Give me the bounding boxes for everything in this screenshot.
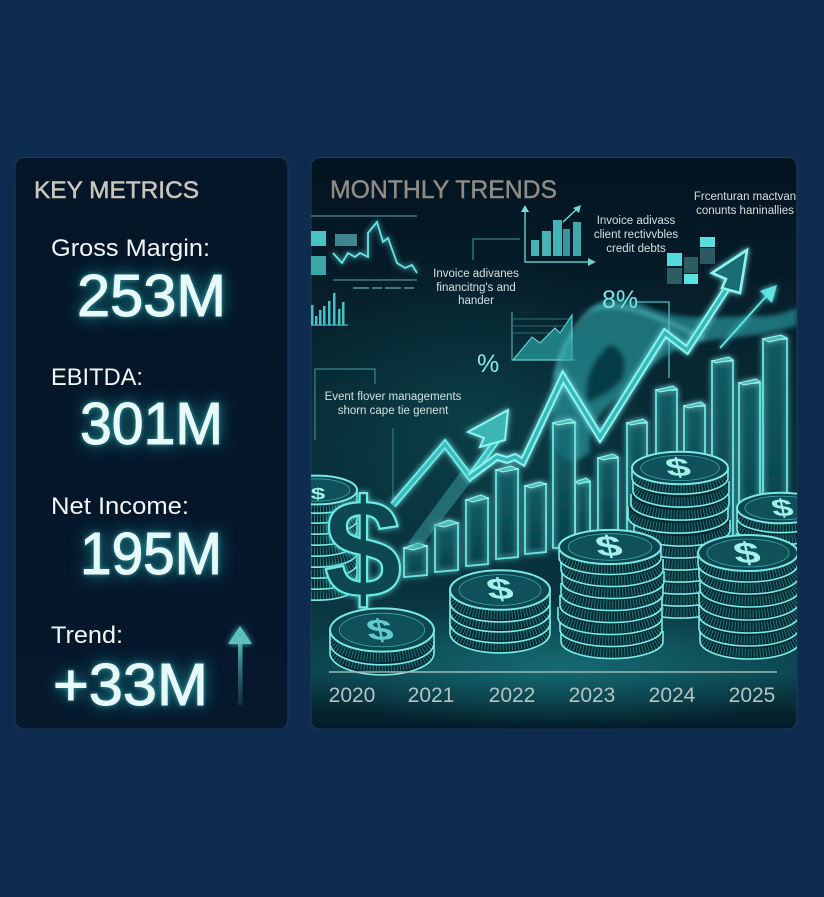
callout: invoice advances left: hander bbox=[458, 295, 494, 307]
heading: monthly trends: MONTHLY TRENDS bbox=[330, 176, 557, 204]
bar chart: glass bars bbox=[404, 335, 787, 577]
x axis year labels: 2024 bbox=[649, 684, 696, 707]
coin stack: back right: $ bbox=[768, 494, 796, 521]
small chart: top left line chart bbox=[311, 216, 417, 288]
small chart: left mini bars bbox=[311, 293, 348, 326]
coin stack: 2023 bbox=[558, 530, 664, 659]
main trend arrow one bbox=[393, 410, 508, 505]
metric: trend bbox=[51, 622, 208, 718]
squares cluster bbox=[667, 237, 715, 284]
floor glow bbox=[280, 250, 824, 730]
coin stack: 2024 tall bbox=[628, 452, 730, 618]
metric: ebitda: EBITDA: bbox=[51, 364, 143, 391]
metric: net income bbox=[51, 493, 222, 587]
metric: ebitda bbox=[51, 364, 223, 457]
metric: net income: Net Income: bbox=[51, 493, 189, 520]
callout: event flover: shorn cape tie genent bbox=[338, 405, 449, 417]
coin stack: back left bbox=[311, 474, 358, 601]
coin stack: back right bbox=[736, 492, 797, 548]
x axis year labels: 2022 bbox=[489, 684, 535, 707]
coin stack: 2025: $ bbox=[730, 537, 764, 570]
percent symbol: % bbox=[477, 350, 499, 378]
metric: gross margin: Gross Margin: bbox=[51, 235, 210, 262]
coin stack: 2024 tall: $ bbox=[662, 453, 694, 482]
metric: ebitda: 301M bbox=[80, 391, 223, 457]
x axis year labels: 2020 bbox=[329, 684, 375, 707]
x axis year labels: 2023 bbox=[569, 684, 615, 707]
main trend arrow two bbox=[470, 250, 747, 477]
panel: monthly trends bbox=[310, 157, 798, 730]
coin stack: 2021: $ bbox=[483, 573, 517, 606]
metric: trend: +33M bbox=[53, 652, 208, 718]
metric: gross margin: 253M bbox=[77, 263, 226, 329]
metric: net income: 195M bbox=[80, 521, 222, 587]
callout: invoice client receivables: credit debts bbox=[606, 243, 666, 255]
callout: top right: Frcenturan mactvan bbox=[694, 191, 796, 203]
callout: event flover bbox=[315, 369, 462, 503]
callout: invoice client receivables: client rectivvbles bbox=[594, 229, 678, 241]
diagonal shadow band bbox=[408, 470, 474, 548]
small chart: top centre bars bbox=[521, 205, 596, 266]
panel: key metrics bbox=[15, 158, 288, 729]
coin stack: 2020 bbox=[330, 608, 434, 675]
callout: invoice advances left: financitng's and bbox=[436, 282, 516, 294]
heading: key metrics: KEY METRICS bbox=[34, 177, 199, 204]
hand illustration bbox=[552, 299, 797, 461]
x axis year labels: 2021 bbox=[408, 684, 454, 707]
8 percent label with connector: 8% bbox=[602, 286, 638, 314]
coin stack: 2020: $ bbox=[363, 614, 397, 647]
callout: invoice advances left bbox=[433, 239, 520, 307]
8 percent label with connector bbox=[602, 286, 669, 378]
x axis line bbox=[329, 671, 777, 673]
callout: invoice client receivables: Invoice adivass bbox=[597, 215, 676, 227]
small chart: area chart bbox=[512, 312, 575, 360]
metric: trend: Trend: bbox=[51, 622, 123, 649]
coin stack: 2021 bbox=[450, 570, 550, 653]
callout: event flover: Event flover managements bbox=[325, 391, 462, 403]
thin arrow bbox=[720, 285, 777, 348]
callout: top right: conunts haninallies bbox=[696, 205, 794, 217]
metric: gross margin bbox=[51, 235, 226, 329]
icon: trend up arrow bbox=[228, 626, 252, 705]
callout: invoice advances left: Invoice adivanes bbox=[433, 268, 519, 280]
x axis year labels bbox=[330, 688, 774, 702]
coin stack: back left: $ bbox=[311, 485, 325, 503]
x axis year labels: 2025 bbox=[729, 684, 775, 707]
coin stack: 2025 bbox=[698, 535, 800, 659]
icon: large dollar sign: $ bbox=[324, 470, 402, 627]
coin stack: 2023: $ bbox=[592, 531, 626, 563]
